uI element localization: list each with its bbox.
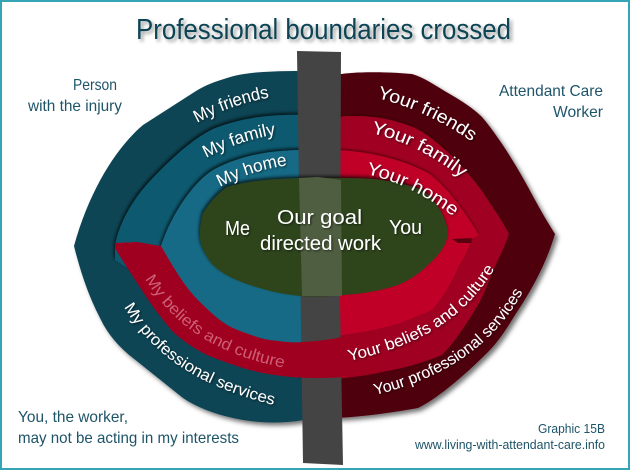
label: our goal directed work: directed work bbox=[260, 233, 382, 255]
label: person with the injury: Person bbox=[73, 77, 117, 94]
label: my friends: My friends bbox=[192, 87, 270, 124]
label: your friends: Your friends bbox=[380, 86, 477, 142]
label: my home: My home bbox=[216, 156, 288, 188]
label: person with the injury: with the injury bbox=[27, 98, 122, 115]
label: your beliefs and culture: Your beliefs and culture bbox=[347, 266, 495, 362]
label: attendant care worker: Attendant Care bbox=[499, 83, 603, 100]
label: our goal directed work bbox=[260, 207, 382, 255]
label: you: You bbox=[389, 217, 422, 239]
bottom left note: may not be acting in my interests bbox=[18, 430, 239, 447]
label: me: Me bbox=[225, 218, 250, 240]
ring: my friends and professional services bbox=[74, 71, 304, 422]
label: my family: My family bbox=[202, 124, 276, 159]
ring: your family and beliefs bbox=[336, 116, 509, 379]
label: attendant care worker: Worker bbox=[553, 104, 604, 121]
graphic credit: Graphic 15B bbox=[538, 422, 605, 436]
ring: my family bbox=[115, 115, 304, 380]
fold shadow at right tip bbox=[452, 238, 472, 243]
label: attendant care worker bbox=[499, 83, 604, 121]
label: person with the injury bbox=[27, 77, 122, 115]
label: your professional services: Your professional services bbox=[372, 289, 524, 395]
centre goal shape bbox=[200, 178, 448, 297]
bottom left note: You, the worker, bbox=[18, 409, 128, 426]
goal overlap on post bbox=[299, 177, 342, 296]
beliefs and culture band bbox=[115, 242, 382, 378]
graphic credit bbox=[414, 422, 605, 452]
label: our goal directed work: Our goal bbox=[277, 207, 362, 229]
ring: your home bbox=[336, 150, 479, 336]
ring: your friends and professional services bbox=[336, 72, 555, 418]
label: my beliefs and culture: My beliefs and culture bbox=[146, 274, 284, 367]
ring labels bbox=[124, 86, 524, 406]
central boundary post bbox=[297, 51, 343, 465]
label: your home: Your home bbox=[369, 162, 460, 217]
right side rings: worker bbox=[336, 72, 555, 418]
graphic credit: www.living-with-attendant-care.info bbox=[414, 438, 605, 452]
centre labels bbox=[225, 207, 422, 255]
label: my professional services: My professional services bbox=[124, 302, 276, 406]
ring: my home and lower band bbox=[161, 150, 304, 350]
label: your family: Your family bbox=[374, 121, 468, 179]
left side rings: person bbox=[74, 71, 304, 422]
title: Professional boundaries crossed bbox=[136, 14, 511, 46]
bottom left note bbox=[18, 409, 239, 447]
